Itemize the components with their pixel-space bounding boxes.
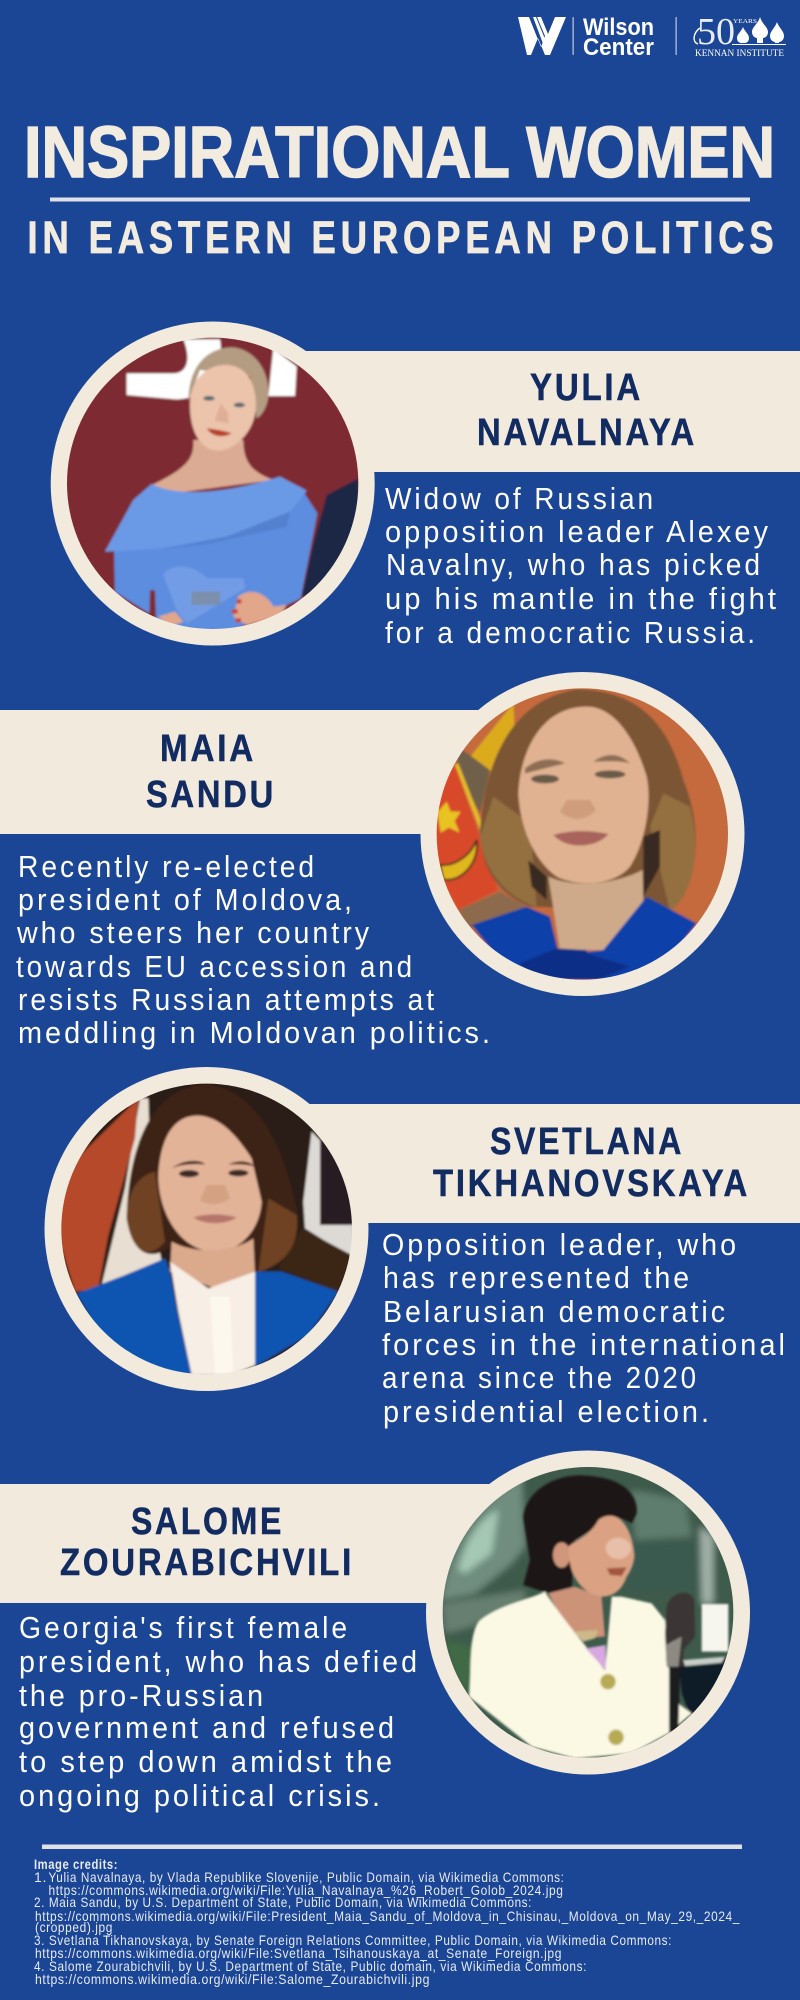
photo: Svetlana Tikhanovskaya [61,1084,352,1374]
photo ring [420,672,744,996]
name: TIKHANOVSKAYA [433,1163,750,1205]
description: president of Moldova, [18,882,355,917]
logo divider [573,17,574,55]
image credits: 2. Maia Sandu, by U.S. Department of State, Public Domain, via Wikimedia Commons: [34,1894,532,1910]
photo: Maia Sandu [436,688,728,980]
description: Recently re-elected [18,849,317,884]
panel: Yulia Navalnaya [51,322,800,650]
name: ZOURABICHVILI [60,1542,354,1584]
Kennan Institute 50 years mark: YEARS [733,18,757,25]
name: SALOME [131,1501,284,1543]
description: resists Russian attempts at [18,982,437,1017]
Kennan Institute 50 years mark: 50 [697,11,735,53]
image credits: 3. Svetlana Tikhanovskaya, by Senate Foreign Relations Committee, Public Domain, via Wikimedia Commons: [34,1932,672,1948]
name [146,728,276,816]
description [385,481,779,650]
description: ongoing political crisis. [19,1778,383,1813]
logo divider two [676,17,677,55]
description [19,1610,420,1813]
description: Opposition leader, who [382,1227,739,1262]
name: SANDU [146,774,276,816]
Kennan Institute 50 years mark [694,11,786,59]
description [16,849,493,1050]
image credits: Yulia Navalnaya, by Vlada Republike Slovenije, Public Domain, via Wikimedia Commons: [48,1869,564,1885]
panel: Salome Zourabichvili [0,1450,752,1813]
description: government and refused [19,1710,397,1745]
Wilson Center wordmark [583,14,654,61]
description: who steers her country [16,915,372,950]
description: Georgia's first female [19,1610,350,1645]
image credits: Image credits: [34,1856,118,1872]
image credits: https://commons.wikimedia.org/wiki/File:Salome_Zourabichvili.jpg [35,1971,430,1987]
image credits [34,1856,740,1987]
logo: Wilson Center and Kennan Institute [518,11,786,61]
name band [0,710,582,834]
photo ring [44,1067,368,1391]
description: has represented the [383,1260,692,1295]
name: YULIA [530,367,643,409]
description: for a democratic Russia. [385,615,758,650]
panel: Svetlana Tikhanovskaya [44,1067,800,1429]
description: up his mantle in the fight [385,581,779,616]
name band [206,1104,800,1223]
description: president, who has defied [19,1644,420,1679]
description: presidential election. [383,1394,712,1429]
description: arena since the 2020 [382,1360,699,1395]
image credits: 4. Salome Zourabichvili, by U.S. Department of State, Public domain, via Wikimedia Commons: [34,1958,587,1974]
panel: Maia Sandu [0,672,744,1050]
image credits: https://commons.wikimedia.org/wiki/File:Svetlana_Tsihanouskaya_at_Senate_Foreign.jpg [35,1945,562,1961]
description: Widow of Russian [385,481,656,516]
Kennan Institute 50 years mark: KENNAN INSTITUTE [695,49,784,59]
description: towards EU accession and [16,949,415,984]
description [382,1227,788,1429]
icon: Wilson Center W mark [518,17,566,55]
description: the pro-Russian [19,1678,266,1713]
name band [0,1484,588,1603]
name: NAVALNAYA [477,412,697,454]
description: Belarusian democratic [383,1294,728,1329]
description: opposition leader Alexey [385,514,771,549]
image credits: (cropped).jpg [35,1919,113,1935]
Wilson Center wordmark: Center [583,34,654,61]
name [433,1121,750,1205]
description: meddling in Moldovan politics. [18,1015,493,1050]
Wilson Center wordmark: Wilson [583,14,654,41]
name: MAIA [160,728,256,770]
image credits: https://commons.wikimedia.org/wiki/File:Yulia_Navalnaya_%26_Robert_Golob_2024.jpg [48,1882,564,1898]
name [60,1501,354,1584]
photo ring [426,1450,750,1774]
name band [212,351,800,472]
description: Navalny, who has picked [386,547,763,582]
image credits: 1. [34,1869,47,1885]
name: SVETLANA [490,1121,684,1163]
photo ring [51,322,375,646]
photo: Yulia Navalnaya [67,338,358,629]
photo: Salome Zourabichvili [442,1467,734,1758]
name [477,367,697,454]
description: to step down amidst the [19,1744,395,1779]
